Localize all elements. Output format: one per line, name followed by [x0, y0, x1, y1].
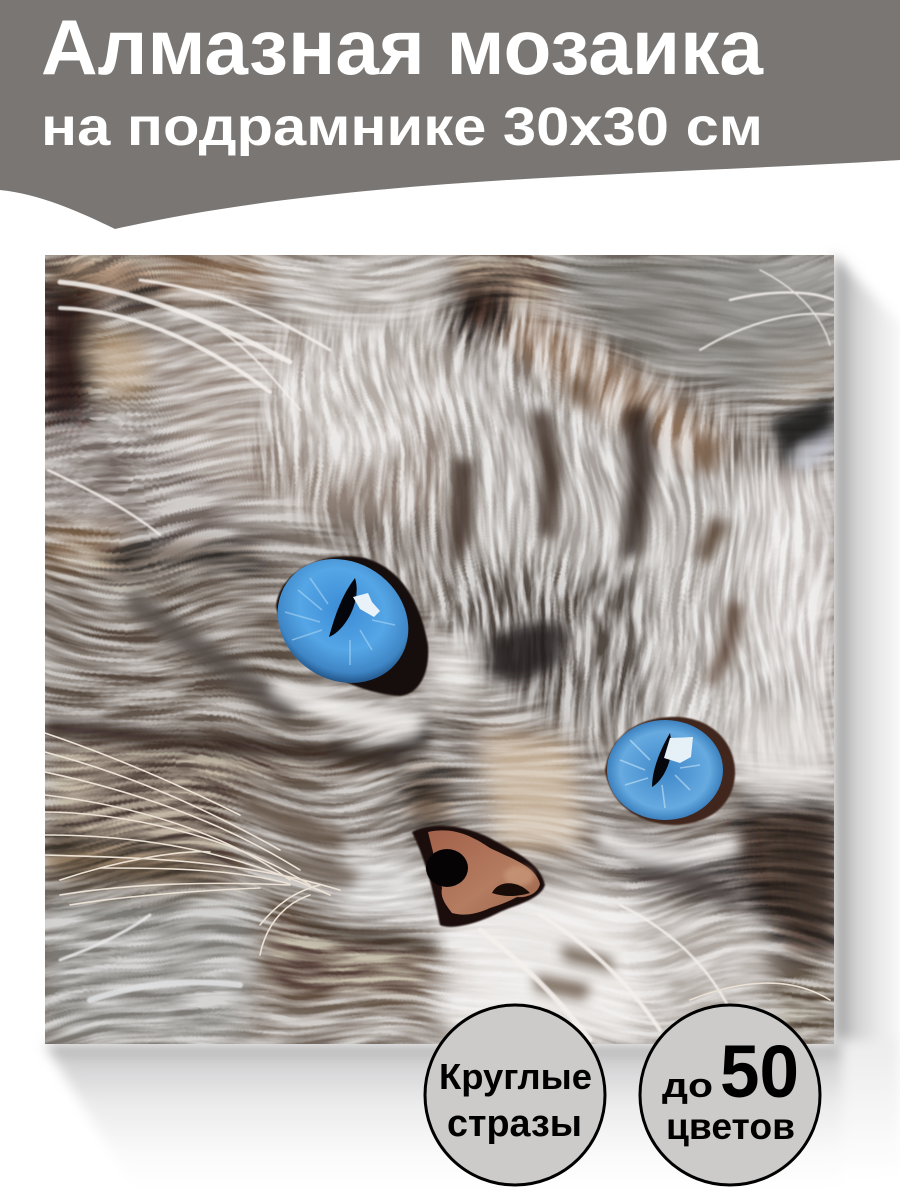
fur strands: horizontal flow: [45, 255, 834, 1044]
fur colour regions: [45, 255, 834, 1044]
icon: left eye: [275, 555, 430, 697]
title: Алмазная мозаика: [41, 3, 764, 91]
header banner: [0, 0, 900, 229]
badge: round rhinestones: [425, 1005, 605, 1185]
sharper tabby markings: [45, 375, 834, 1000]
badge: up to 50 colours: до: [662, 1067, 713, 1105]
canvas shadow: [45, 255, 900, 1190]
badge: round rhinestones: стразы: [447, 1103, 582, 1145]
badge: up to 50 colours: цветов: [666, 1106, 795, 1147]
icon: nose: [412, 826, 545, 927]
badge: up to 50 colours: 50: [720, 1030, 799, 1113]
whiskers: [45, 733, 830, 1000]
canvas print: cat portrait: [45, 255, 834, 1044]
fur strands: vertical flow on the forehead: [242, 288, 834, 770]
badge: up to 50 colours: [640, 1005, 820, 1185]
badge: round rhinestones: Круглые: [439, 1056, 592, 1097]
subtitle: на подрамнике 30х30 см: [41, 97, 763, 157]
bright guard hairs: [48, 270, 834, 1040]
glaze: large tonal corrections over the fur: [45, 262, 834, 1030]
icon: right eye: [605, 717, 735, 825]
